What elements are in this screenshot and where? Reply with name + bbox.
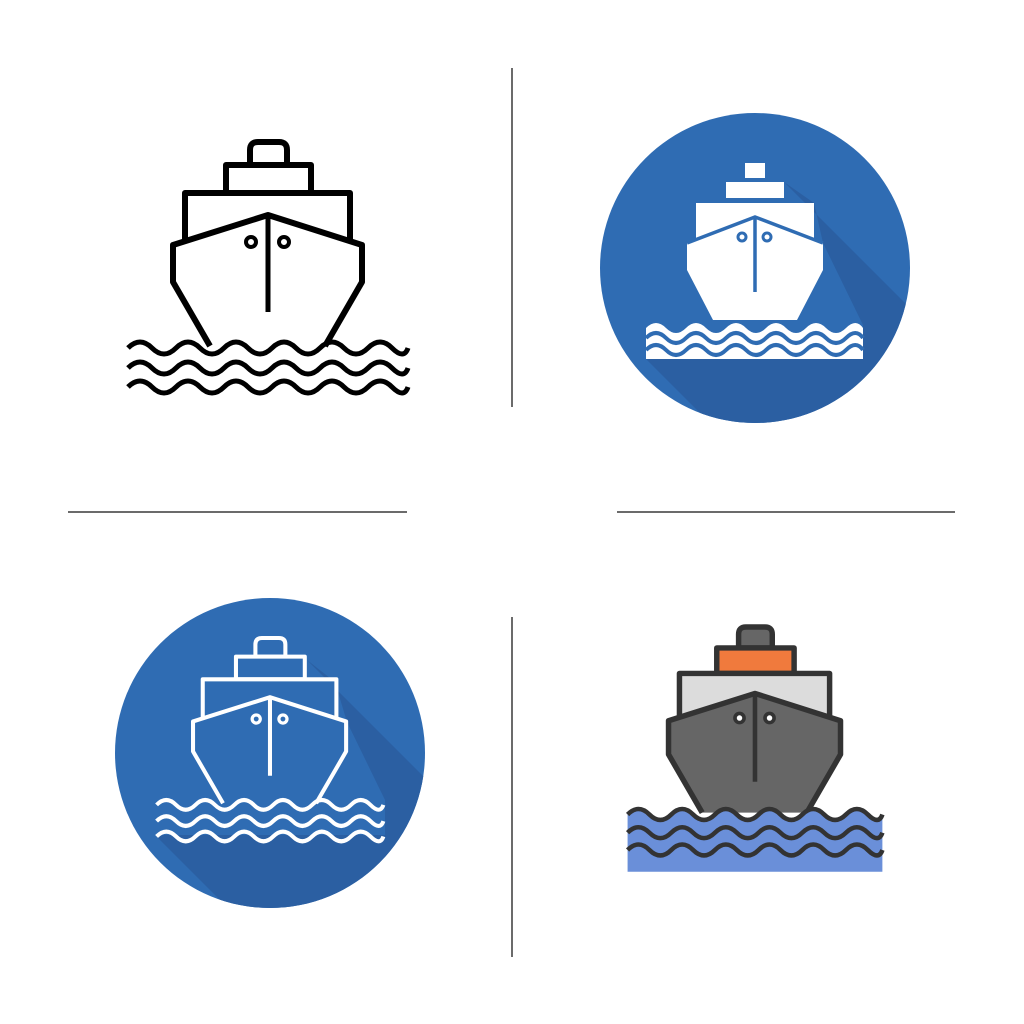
icon: line ship in blue circle (bottom-left) bbox=[115, 598, 425, 908]
icon: colored ship (bottom-right) bbox=[628, 627, 882, 872]
icon: flat ship in blue circle (top-right) bbox=[600, 113, 910, 423]
icon: outline ship (top-left) bbox=[128, 142, 408, 393]
